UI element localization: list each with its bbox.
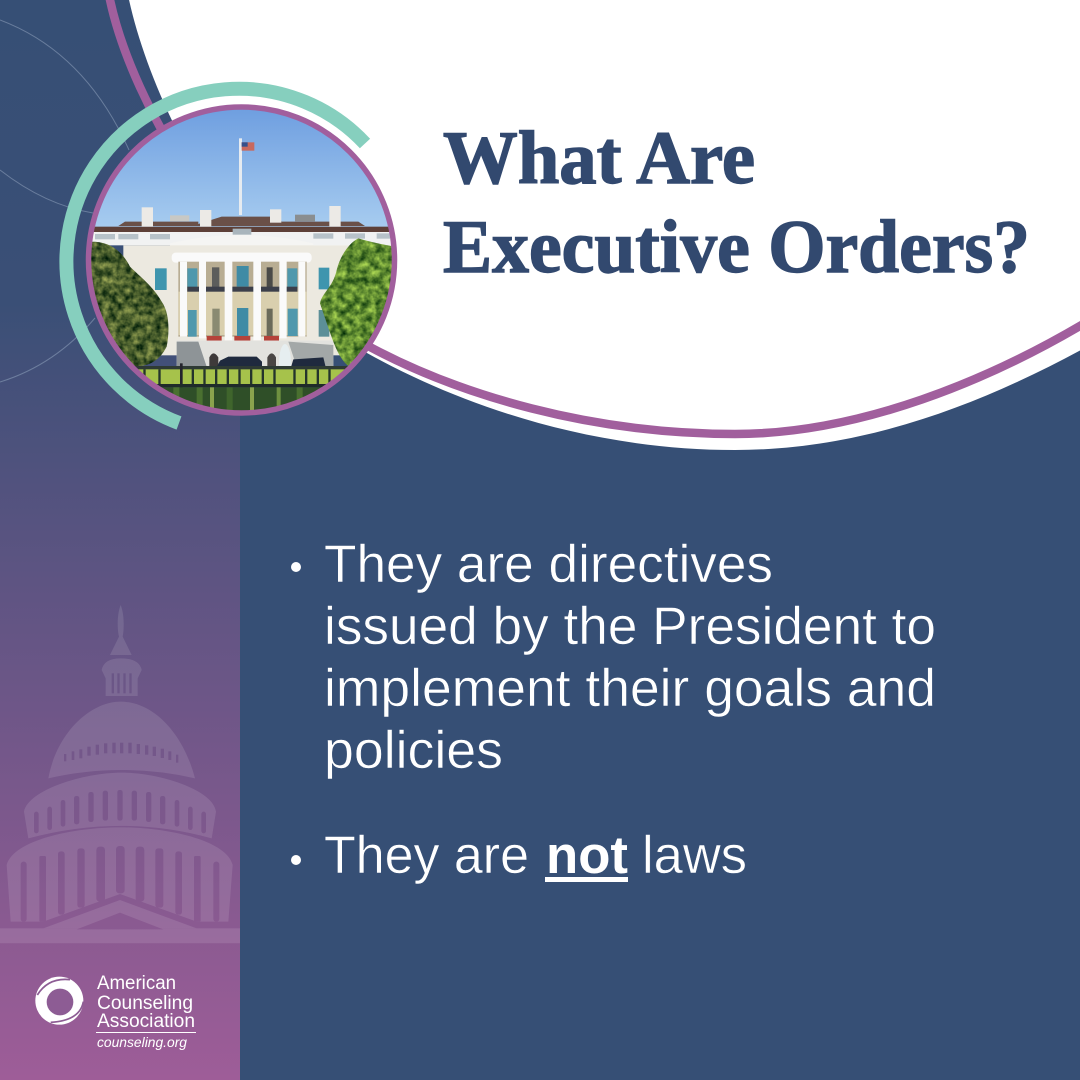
logo wordmark: counseling.org [97, 1034, 187, 1050]
title: Executive Orders? [443, 206, 1030, 289]
bullet item 2 [291, 826, 747, 885]
bullet list [291, 535, 936, 885]
thin decorative circle lines [0, 20, 129, 382]
photo: White House [83, 103, 403, 417]
bullet item 1: issued by the President to [324, 597, 936, 656]
bullet item 2: not [546, 826, 628, 885]
title: What Are [443, 117, 755, 200]
icon: logo ring [35, 977, 83, 1025]
logo wordmark [96, 973, 196, 1050]
photo ring [88, 107, 394, 413]
left gradient strip [0, 0, 240, 1080]
fountain [279, 344, 291, 366]
capitol silhouette [0, 590, 240, 950]
logo wordmark: Counseling [97, 993, 193, 1014]
logo wordmark: American [97, 973, 176, 994]
bullet item 1: implement their goals and [324, 659, 936, 718]
purple swoosh [108, 0, 1080, 434]
tree right [320, 238, 397, 366]
bullet item 1: They are directives [324, 535, 773, 594]
bullet item 2: They are [324, 826, 529, 885]
teal arc [66, 89, 365, 423]
icon: flag and pole [239, 138, 254, 215]
white title shape [127, 0, 1080, 450]
building facade [88, 229, 395, 367]
roofline and chimneys [90, 206, 393, 233]
bullet item 1 [291, 535, 936, 780]
title [443, 117, 1030, 289]
logo: American Counseling Association [35, 973, 196, 1050]
bullet item 2: laws [642, 826, 747, 885]
bullet item 1: policies [324, 721, 503, 780]
fence and hedge [135, 363, 348, 410]
logo wordmark: Association [97, 1011, 195, 1032]
cars [217, 356, 326, 366]
tree left [83, 242, 168, 367]
